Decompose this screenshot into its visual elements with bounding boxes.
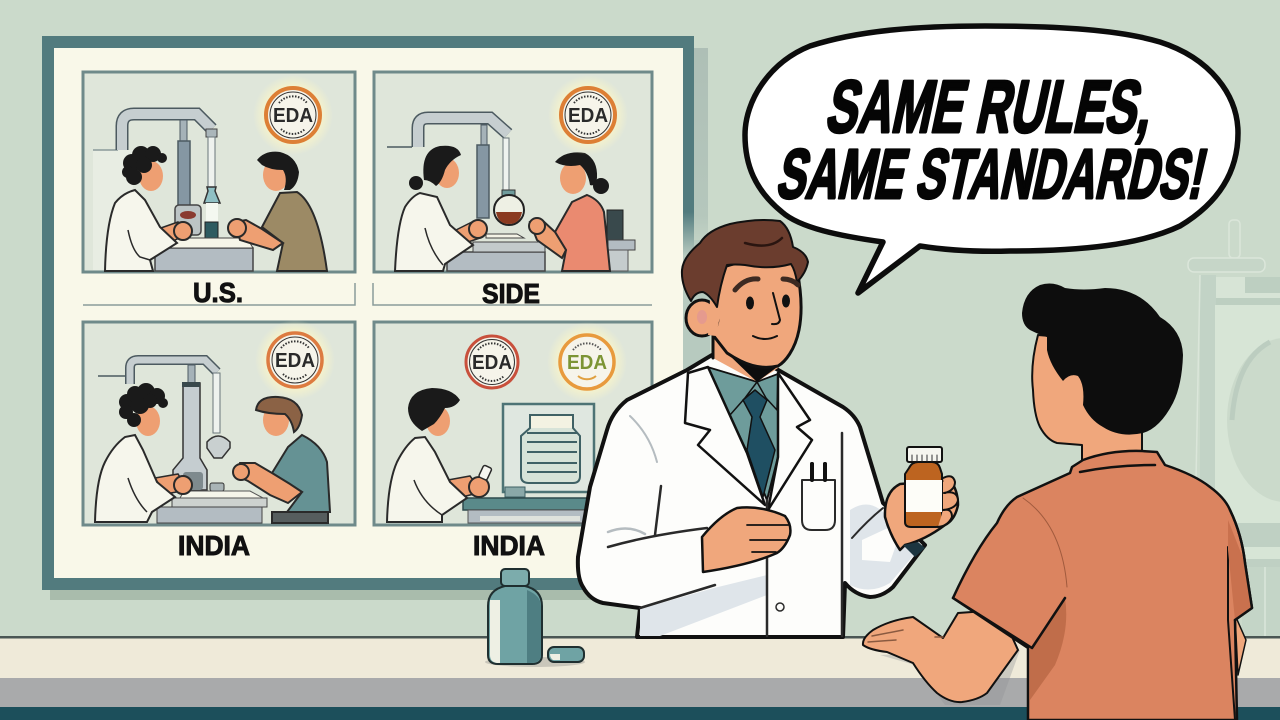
seal: EDA: EDA — [273, 105, 313, 127]
pharmacist — [578, 220, 958, 637]
poster: four comparison panels — [42, 36, 695, 590]
pill bottle — [905, 447, 942, 527]
machine — [122, 114, 220, 238]
ear — [686, 300, 722, 336]
seal: EDA: EDA — [568, 105, 608, 127]
shirt — [953, 451, 1252, 720]
medicine bottle on counter — [485, 569, 585, 667]
right hand — [885, 480, 958, 550]
label: U.S.: U.S. — [193, 277, 243, 308]
pill on counter — [548, 647, 584, 662]
customer seen from behind — [863, 284, 1252, 720]
monitor with jar icon — [503, 404, 594, 497]
neck — [713, 330, 778, 382]
poster shadow — [694, 48, 708, 258]
far arm — [1235, 615, 1246, 675]
collar — [707, 367, 778, 415]
technician in coral shirt — [529, 152, 610, 271]
seal: EDA — [548, 75, 628, 155]
eyes and brows — [746, 296, 754, 310]
machine — [387, 118, 524, 238]
seal: EDA red — [466, 336, 518, 388]
label: INDIA right: INDIA — [473, 530, 545, 561]
face — [713, 258, 801, 367]
arm shadow on counter — [880, 650, 1020, 705]
coat button — [776, 603, 784, 611]
background equipment, faint — [1188, 220, 1280, 640]
tie — [743, 390, 775, 497]
technician in teal shirt — [233, 397, 330, 523]
label: INDIA left: INDIA — [178, 530, 250, 561]
lab coat — [578, 355, 925, 637]
left hand holding lapel — [702, 507, 790, 572]
coat seams — [767, 433, 842, 636]
table — [155, 248, 253, 271]
machine — [98, 360, 230, 491]
panel: U.S. facility — [83, 72, 355, 272]
shirt — [707, 367, 778, 500]
scientist in white coat — [105, 146, 192, 271]
arm and hand — [863, 610, 1018, 702]
panel: side by side facility — [374, 72, 652, 272]
neck shadow — [727, 353, 780, 382]
hair — [1022, 284, 1183, 435]
seal: EDA green: EDA — [567, 352, 607, 374]
nose and mouth — [753, 293, 780, 339]
speech bubble — [745, 26, 1238, 293]
shirt shading and seams — [1030, 598, 1066, 700]
scientist in white coat — [95, 383, 192, 522]
table — [157, 507, 262, 523]
technician in olive shirt — [228, 152, 327, 271]
speech text — [772, 65, 1229, 213]
seal: EDA: EDA — [275, 350, 315, 372]
ear — [1062, 378, 1082, 412]
fingers — [938, 476, 958, 527]
head and neck — [1032, 335, 1142, 462]
scientist in white coat — [395, 146, 487, 271]
lapels — [685, 367, 765, 505]
hair — [682, 220, 808, 307]
table — [463, 498, 588, 510]
seal: EDA red: EDA — [472, 352, 512, 374]
label: SIDE: SIDE — [482, 278, 540, 309]
table — [447, 252, 545, 271]
panel: India inspection — [374, 322, 652, 525]
pocket with pens — [802, 464, 835, 530]
seal: EDA green — [547, 322, 627, 402]
seal: EDA — [253, 75, 333, 155]
scientist in white coat — [387, 388, 492, 522]
counter — [0, 636, 1280, 720]
panel: India facility — [83, 320, 355, 525]
seal: EDA — [255, 320, 335, 400]
